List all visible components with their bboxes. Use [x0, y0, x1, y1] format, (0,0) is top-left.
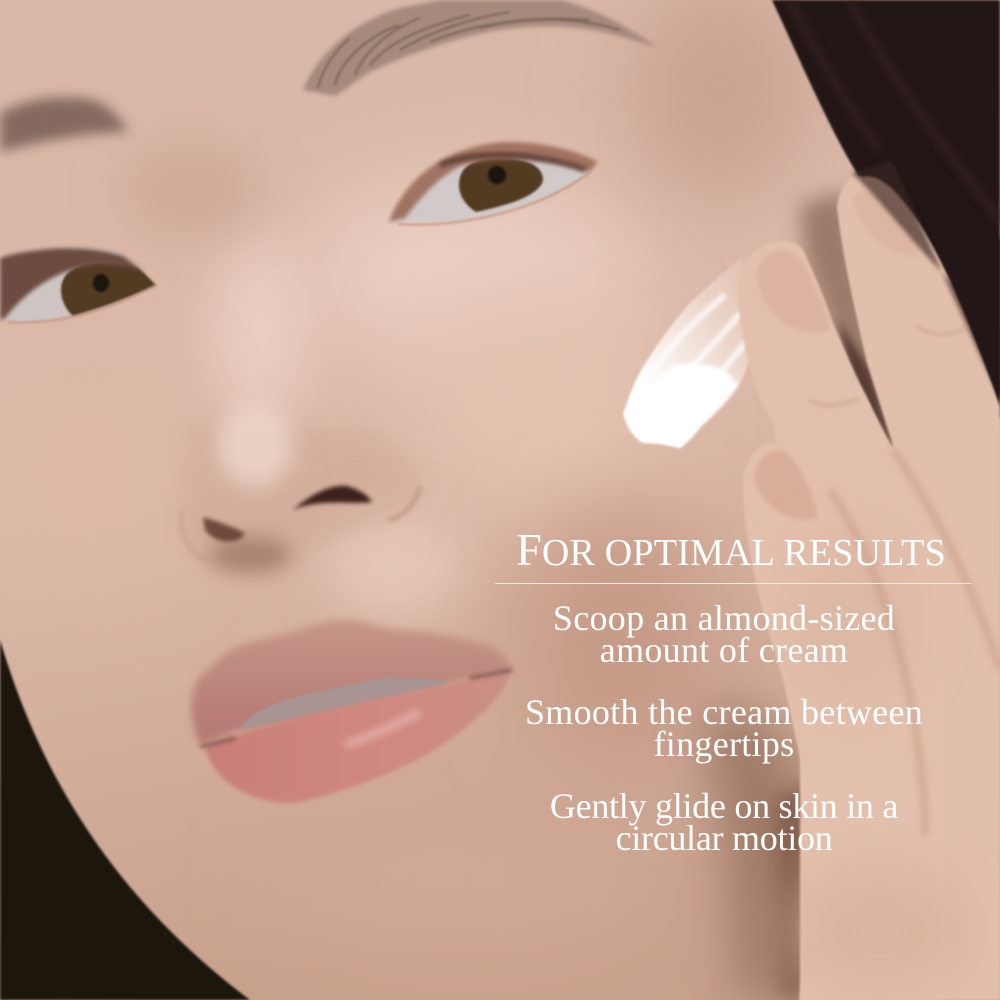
- step 3 text: Gently glide on skin in a: [550, 786, 898, 826]
- lips: [191, 620, 512, 803]
- step 2 text: Smooth the cream between: [525, 692, 923, 732]
- cream swatch: [623, 258, 750, 448]
- step 3 text: [550, 786, 898, 858]
- step 1 text: amount of cream: [600, 630, 848, 670]
- nose: [180, 403, 420, 573]
- hair: top right: [772, 0, 1000, 420]
- step 2 text: fingertips: [654, 724, 794, 764]
- third finger and palm: [800, 176, 1000, 1000]
- hand with fingers: [800, 176, 1000, 1000]
- cheek shadow behind fingers: [800, 190, 900, 450]
- hair: bottom left: [0, 640, 250, 1000]
- middle finger: [737, 241, 945, 1000]
- right eye: [389, 142, 598, 225]
- left eye: [0, 248, 156, 322]
- right eyebrow: [303, 0, 657, 96]
- left eyebrow: [0, 97, 128, 152]
- hair strands over finger: [852, 150, 1000, 400]
- step 1 text: Scoop an almond-sized: [553, 598, 895, 638]
- lower finger: [743, 443, 930, 1000]
- finger creases and palm shading: [780, 325, 1000, 1000]
- heading: FOR OPTIMAL RESULTS: [516, 524, 946, 575]
- step 1 text: [553, 598, 895, 670]
- step 2 text: [525, 692, 923, 764]
- step 3 text: circular motion: [616, 818, 832, 858]
